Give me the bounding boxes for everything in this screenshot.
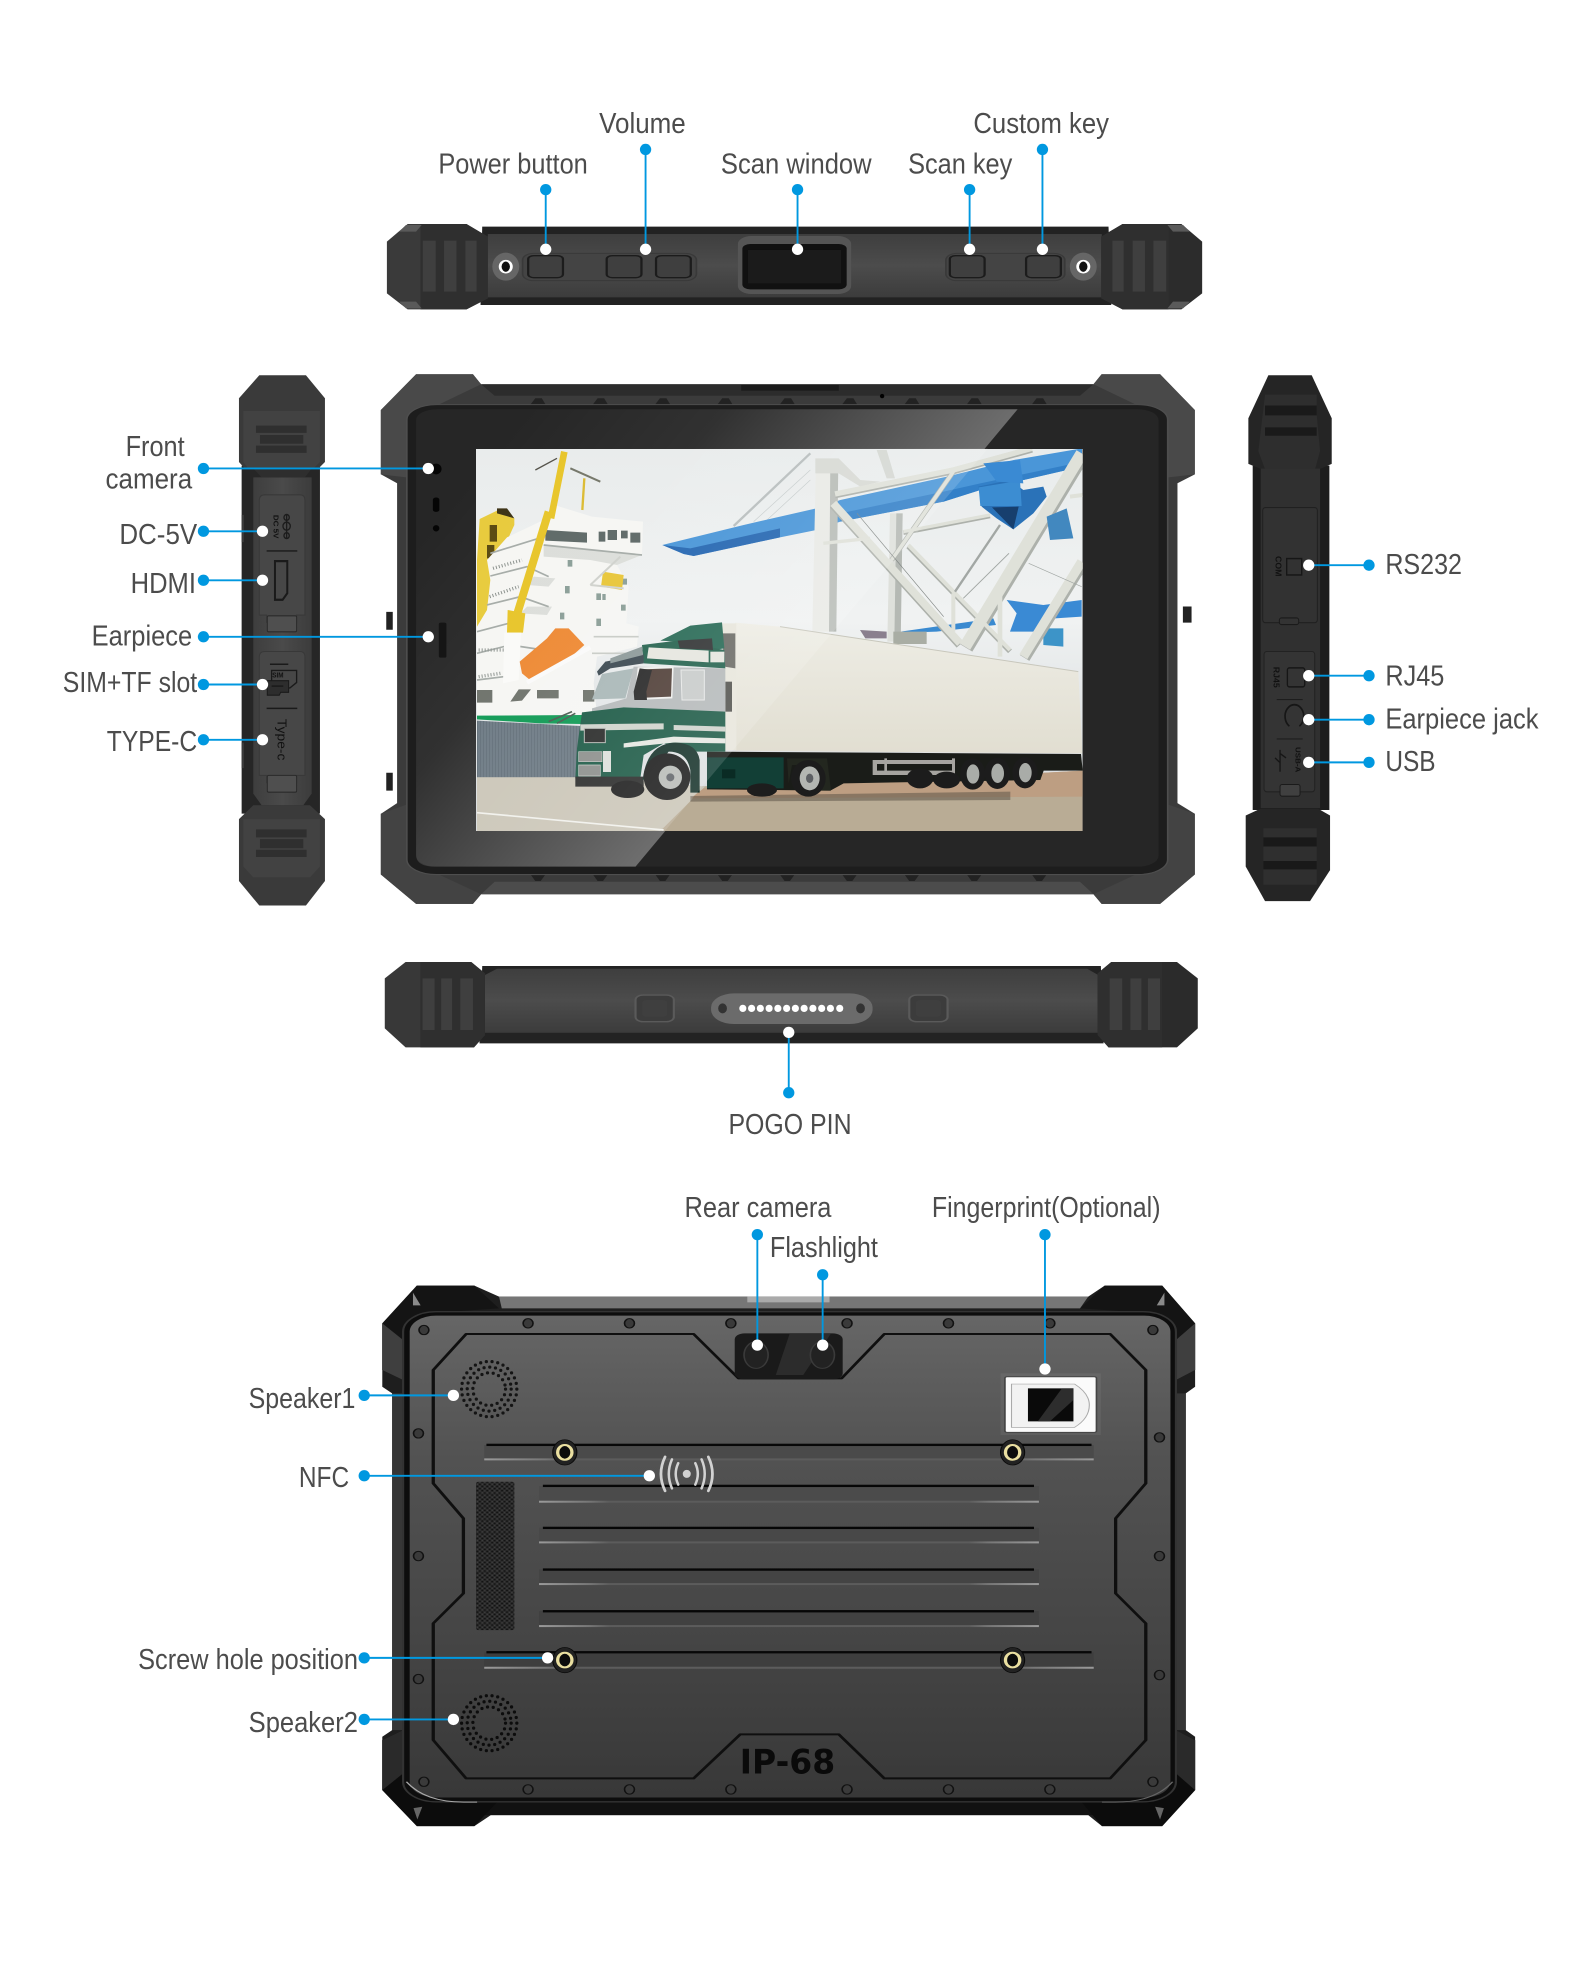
- icon: DC power: [283, 514, 290, 539]
- speaker grille 2: [462, 1696, 517, 1751]
- callout: Front camera: [106, 431, 434, 496]
- speaker grille 1: [462, 1361, 517, 1417]
- icon: USB: [1275, 750, 1286, 772]
- callout: Volume: Volume: [599, 108, 686, 140]
- callout: Front camera: Front: [126, 431, 185, 463]
- callout: Earpiece: [92, 621, 434, 653]
- callout: NFC: [299, 1462, 655, 1494]
- callout: Fingerprint (Optional): Fingerprint(Optional): [932, 1192, 1161, 1224]
- icon: COM port: [1287, 559, 1302, 575]
- device: top edge view: [387, 224, 1202, 309]
- callout: Custom key: Custom key: [973, 108, 1110, 140]
- brass mounting holes: [553, 1440, 1025, 1673]
- callout: DC-5V: [119, 519, 268, 551]
- ship: [477, 452, 643, 777]
- device: back view: [382, 1286, 1195, 1826]
- callout: Fingerprint (Optional): [932, 1192, 1161, 1375]
- callout: Scan window: Scan window: [721, 148, 872, 180]
- screen photo: truck at port: [476, 448, 1083, 831]
- device: left edge view: SIM: [272, 673, 284, 680]
- callout: Speaker1: [249, 1383, 459, 1415]
- callout: HDMI: [131, 568, 268, 600]
- callout: SIM+TF slot: SIM+TF slot: [63, 667, 197, 699]
- callout: HDMI: HDMI: [131, 568, 196, 600]
- back cover screws: [414, 1319, 1164, 1794]
- icon: HDMI port: [275, 561, 287, 600]
- device: right edge view: USB-A: [1293, 747, 1302, 773]
- camera module: [735, 1333, 843, 1379]
- callout: Speaker1: Speaker1: [249, 1383, 355, 1415]
- truck: [575, 622, 1083, 802]
- POGO connector: [711, 993, 873, 1024]
- callout: DC-5V: DC-5V: [119, 519, 198, 551]
- callout: USB: [1303, 746, 1436, 778]
- callout: RS232: [1303, 549, 1462, 581]
- callout: POGO PIN: [728, 1027, 852, 1141]
- icon: headset: [1285, 705, 1304, 726]
- callout: Flashlight: Flashlight: [770, 1232, 878, 1264]
- callout: USB: USB: [1385, 746, 1436, 778]
- callout: TYPE-C: TYPE-C: [107, 726, 197, 758]
- callout: Rear camera: [685, 1192, 832, 1351]
- callout: RS232: RS232: [1385, 549, 1462, 581]
- callout: Speaker2: Speaker2: [249, 1707, 358, 1739]
- callout: Front camera: camera: [106, 464, 193, 496]
- callout: Screw hole position: Screw hole position: [138, 1644, 358, 1676]
- device: left edge view: [239, 375, 325, 905]
- device: left edge view: DC 5V: [272, 515, 280, 539]
- text: IP-68 badge: IP-68: [740, 1742, 835, 1781]
- icon: RJ45 port: [1287, 668, 1305, 687]
- callout: Scan key: [908, 148, 1013, 255]
- textured grip strip: [476, 1482, 514, 1630]
- device: right edge view: COM: [1273, 556, 1283, 576]
- icon: NFC waves: [661, 1457, 712, 1491]
- callout: TYPE-C: [107, 726, 268, 758]
- ground: [477, 771, 1083, 831]
- callout: Scan window: [721, 148, 872, 255]
- callout: Earpiece: Earpiece: [92, 621, 192, 653]
- callout: Custom key: [973, 108, 1110, 255]
- front view glare over screen and sensors: [431, 449, 988, 831]
- callout: Screw hole position: [138, 1644, 553, 1676]
- callout: Earpiece jack: [1303, 703, 1539, 735]
- callout: Volume: [599, 108, 686, 255]
- device: right edge view: RJ45: [1271, 667, 1281, 688]
- mounting rails: [484, 1444, 1094, 1669]
- callout: Earpiece jack: Earpiece jack: [1385, 703, 1539, 735]
- ventilation grooves: [539, 1485, 1039, 1627]
- callout: Power button: [438, 148, 588, 255]
- device: front view bezel: [381, 374, 1195, 904]
- callout: Power button: Power button: [438, 148, 588, 180]
- callout: POGO PIN: POGO PIN: [728, 1109, 852, 1141]
- callout: Rear camera: Rear camera: [685, 1192, 832, 1224]
- crane structure: [662, 448, 1083, 658]
- callout: NFC: NFC: [299, 1462, 349, 1494]
- overlays and callouts layer: [63, 108, 1539, 1781]
- device: right edge view: [1246, 375, 1332, 901]
- fingerprint module: [1001, 1373, 1101, 1435]
- callout: Speaker2: [249, 1707, 459, 1739]
- icon: SIM card: [272, 670, 297, 688]
- callout: Flashlight: [770, 1232, 878, 1351]
- callout: RJ45: RJ45: [1385, 661, 1444, 693]
- device: left edge view: Type-c: [274, 719, 289, 761]
- device: bottom edge view: [385, 962, 1198, 1047]
- callout: RJ45: [1303, 661, 1444, 693]
- callout: Scan key: Scan key: [908, 148, 1013, 180]
